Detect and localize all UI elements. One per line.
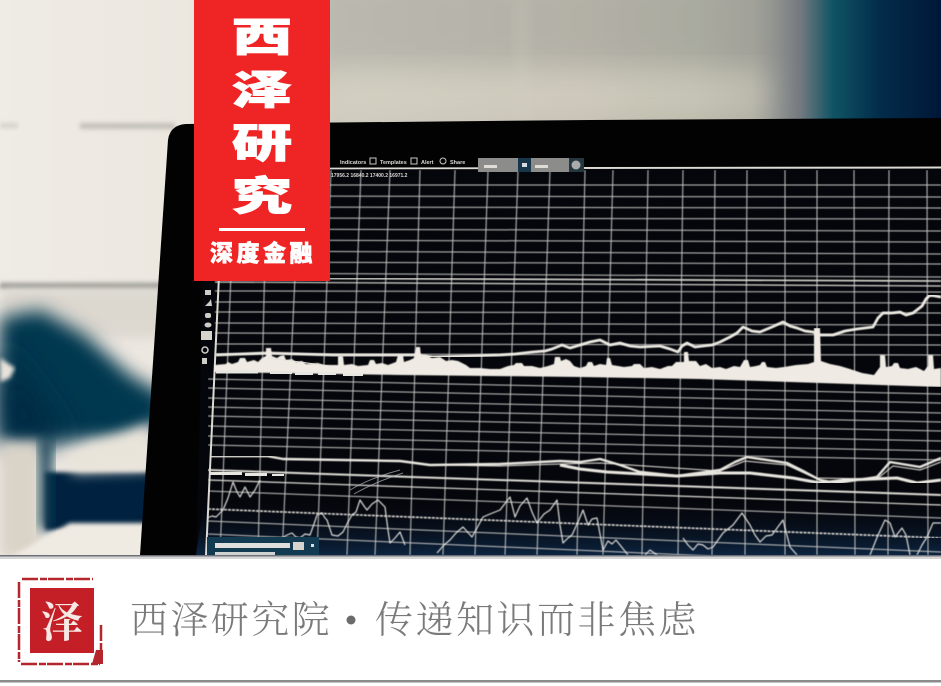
banner title: 西泽研究: 西	[232, 5, 292, 63]
chart toolbar	[340, 158, 584, 172]
chart toolbar: Indicators	[340, 160, 366, 166]
volume legend	[216, 371, 363, 376]
seal logo: 泽	[41, 590, 83, 650]
slogan dot	[346, 616, 356, 624]
oscillator lines	[210, 456, 941, 483]
volume band	[214, 328, 941, 387]
slogan: 西泽研究院	[130, 589, 332, 644]
monitor bezel	[140, 118, 941, 555]
lower navy glow	[196, 518, 941, 555]
screen frame lines	[206, 168, 941, 555]
footer strip	[0, 555, 941, 686]
lower jagged indicator	[207, 480, 941, 555]
banner subtitle: 深度金融: 深度金融	[210, 234, 316, 268]
banner title: 西泽研究	[232, 5, 292, 222]
seal logo	[19, 579, 103, 664]
faint reflection arcs	[350, 470, 403, 494]
chart toolbar: Alert	[421, 160, 434, 166]
chart screen	[196, 168, 941, 566]
banner title: 西泽研究: 究	[232, 164, 292, 222]
slogan second part: 传递知识而非焦虑	[375, 589, 699, 644]
banner title: 西泽研究: 研	[232, 111, 292, 169]
oscillator legend	[210, 472, 284, 476]
volume moving-average trace	[268, 358, 330, 366]
chart toolbar: Share	[450, 160, 465, 166]
banner divider	[219, 228, 305, 231]
bright grid lines	[208, 278, 941, 538]
red brand banner	[194, 0, 330, 281]
bottom-left data widget	[207, 537, 319, 555]
banner title: 西泽研究: 泽	[232, 58, 292, 116]
left tool icons	[201, 290, 212, 364]
chart grid	[208, 170, 941, 566]
chart header values: 17956.2 16840.2 17400.2 16971.2	[331, 173, 408, 179]
price line	[216, 295, 941, 357]
chart toolbar: Templates	[380, 160, 407, 166]
